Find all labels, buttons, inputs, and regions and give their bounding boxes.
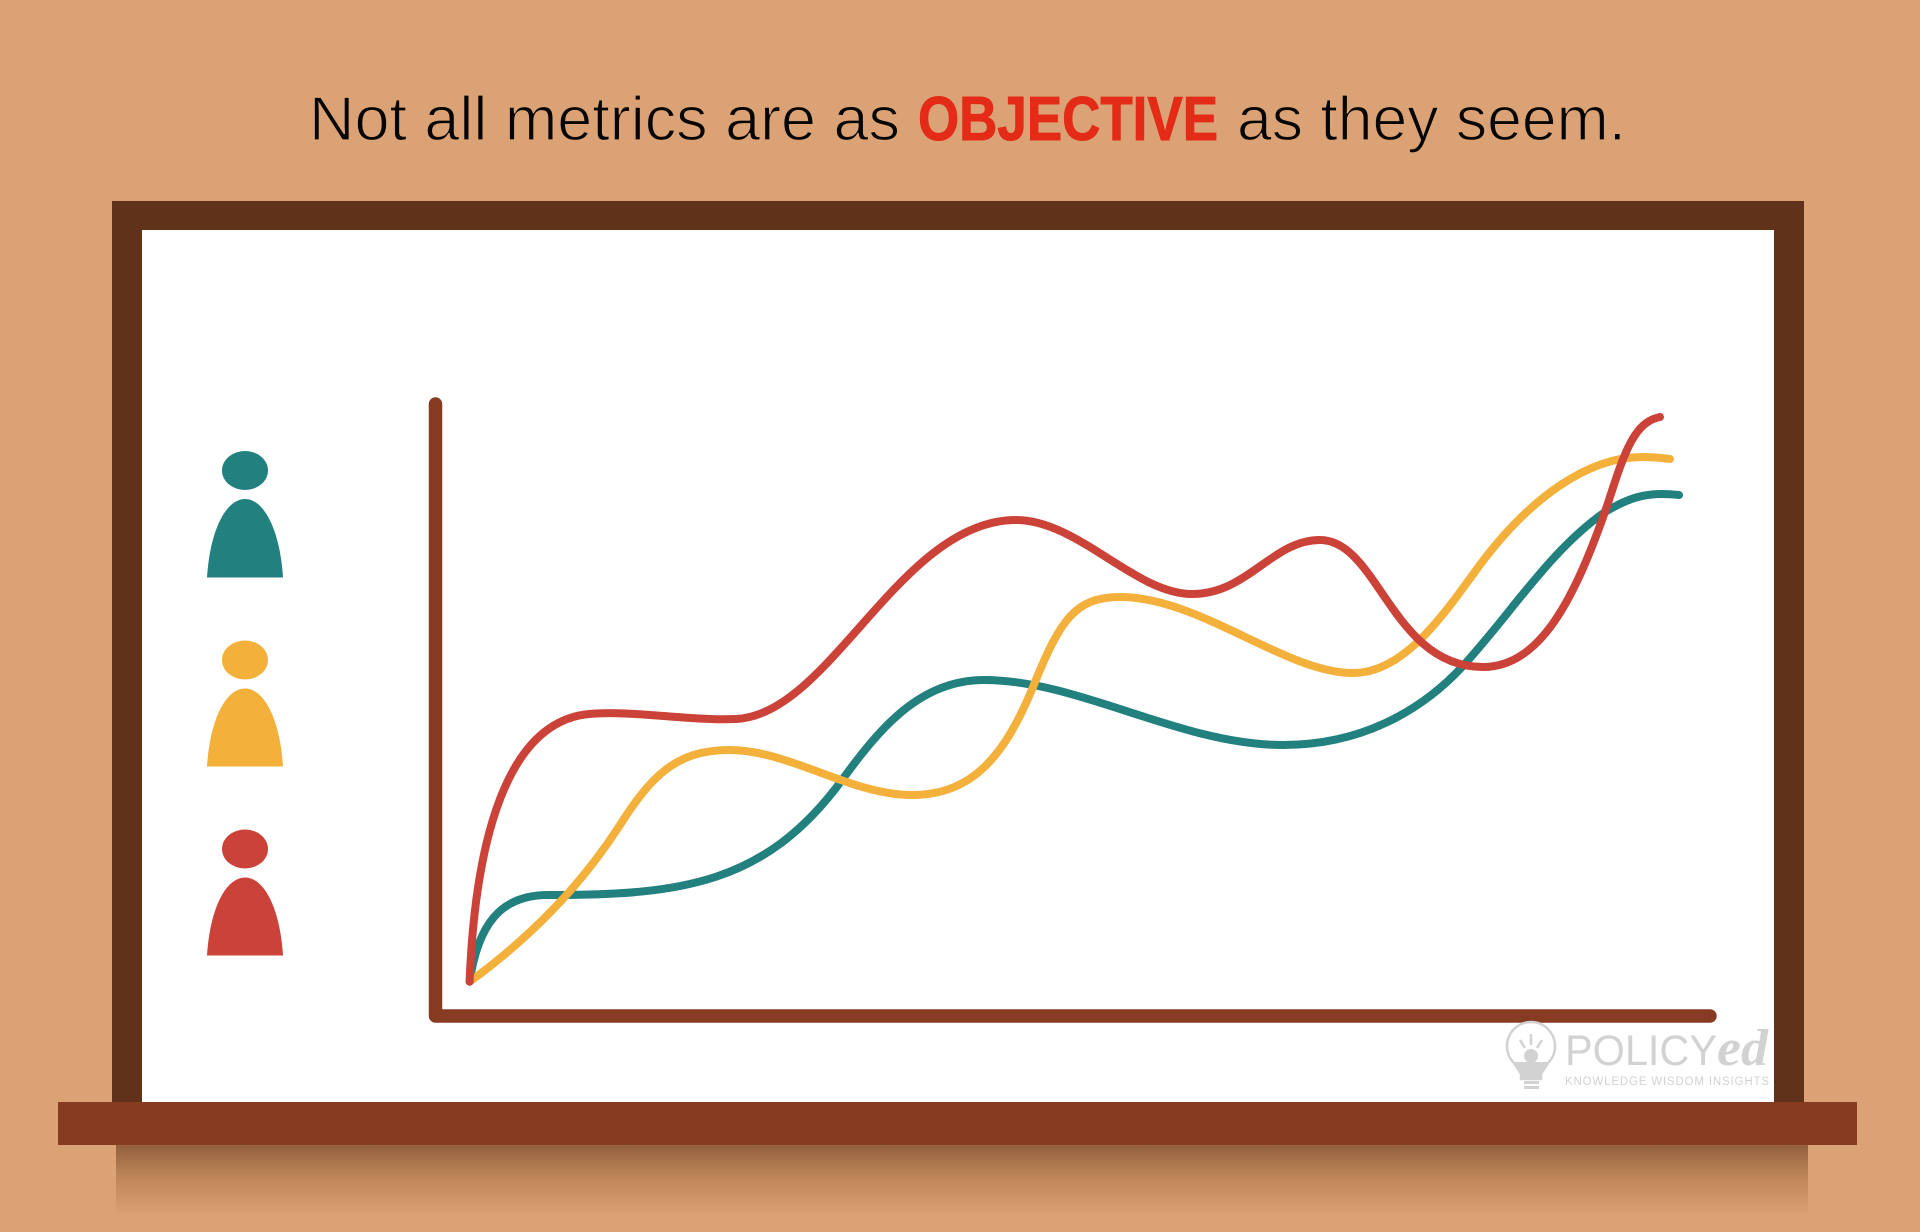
- shelf shadow: [116, 1144, 1808, 1216]
- shelf: [58, 1102, 1857, 1145]
- whiteboard frame: [112, 201, 1804, 1102]
- chart lines: [470, 417, 1679, 982]
- logo wordmark: POLICY: [1565, 1027, 1717, 1075]
- title: OBJECTIVE: [918, 85, 1218, 154]
- legend: people icons: [207, 451, 283, 956]
- line chart: [436, 404, 1710, 1016]
- icon: teal person: [207, 451, 283, 578]
- icon: light bulb: [1507, 1022, 1555, 1089]
- title: as they seem.: [1237, 85, 1626, 154]
- title: Not all metrics are as: [309, 85, 900, 154]
- chart axes: [436, 404, 1710, 1016]
- red line: [470, 417, 1660, 982]
- title: [309, 85, 1626, 154]
- logo: PolicyEd watermark: [1507, 1020, 1769, 1089]
- yellow line: [470, 457, 1670, 982]
- teal line: [470, 494, 1679, 982]
- logo: PolicyEd watermark: ed: [1717, 1020, 1769, 1077]
- icon: red person: [207, 830, 283, 956]
- icon: yellow person: [207, 640, 283, 766]
- logo tagline: KNOWLEDGE WISDOM INSIGHTS: [1565, 1076, 1769, 1088]
